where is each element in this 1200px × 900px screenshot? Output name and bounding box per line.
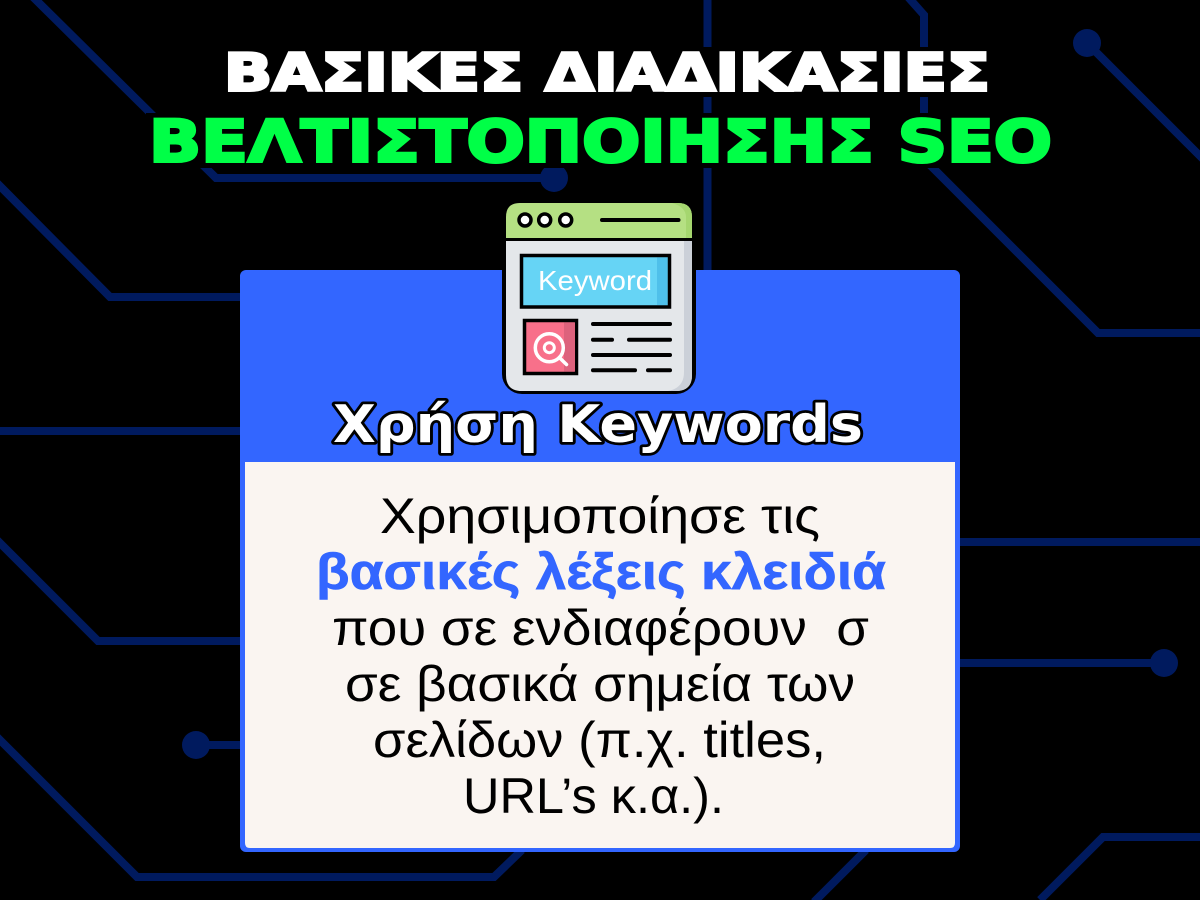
title line 2: ΒΕΛΤΙΣΤΟΠΟΙΗΣΗΣ SEO xyxy=(149,108,1052,176)
highlighted keywords: βασικές λέξεις κλειδιά xyxy=(316,543,886,600)
body text: Χρησιμοποίησε τις xyxy=(380,488,820,544)
title xyxy=(146,44,1055,176)
title line 1: ΒΑΣΙΚΕΣ ΔΙΑΔΙΚΑΣΙΕΣ xyxy=(224,44,990,104)
keyword box: Keyword xyxy=(538,265,652,296)
window buttons xyxy=(519,214,572,226)
icon: target magnifier xyxy=(524,320,576,374)
keyword box xyxy=(522,256,670,307)
heading: Χρήση Keywords xyxy=(333,395,863,455)
body text: URL’s κ.α.). xyxy=(463,768,724,824)
panel header xyxy=(240,270,960,852)
body text xyxy=(316,488,886,824)
body text: σε βασικά σημεία των xyxy=(345,656,855,712)
body text: σελίδων (π.χ. titles, xyxy=(373,712,826,768)
icon: keyword web page xyxy=(502,199,696,394)
panel body xyxy=(245,462,955,848)
panel: keywords card xyxy=(240,270,960,852)
body text: που σε ενδιαφέρουν σ xyxy=(332,600,869,656)
text lines xyxy=(593,324,670,370)
